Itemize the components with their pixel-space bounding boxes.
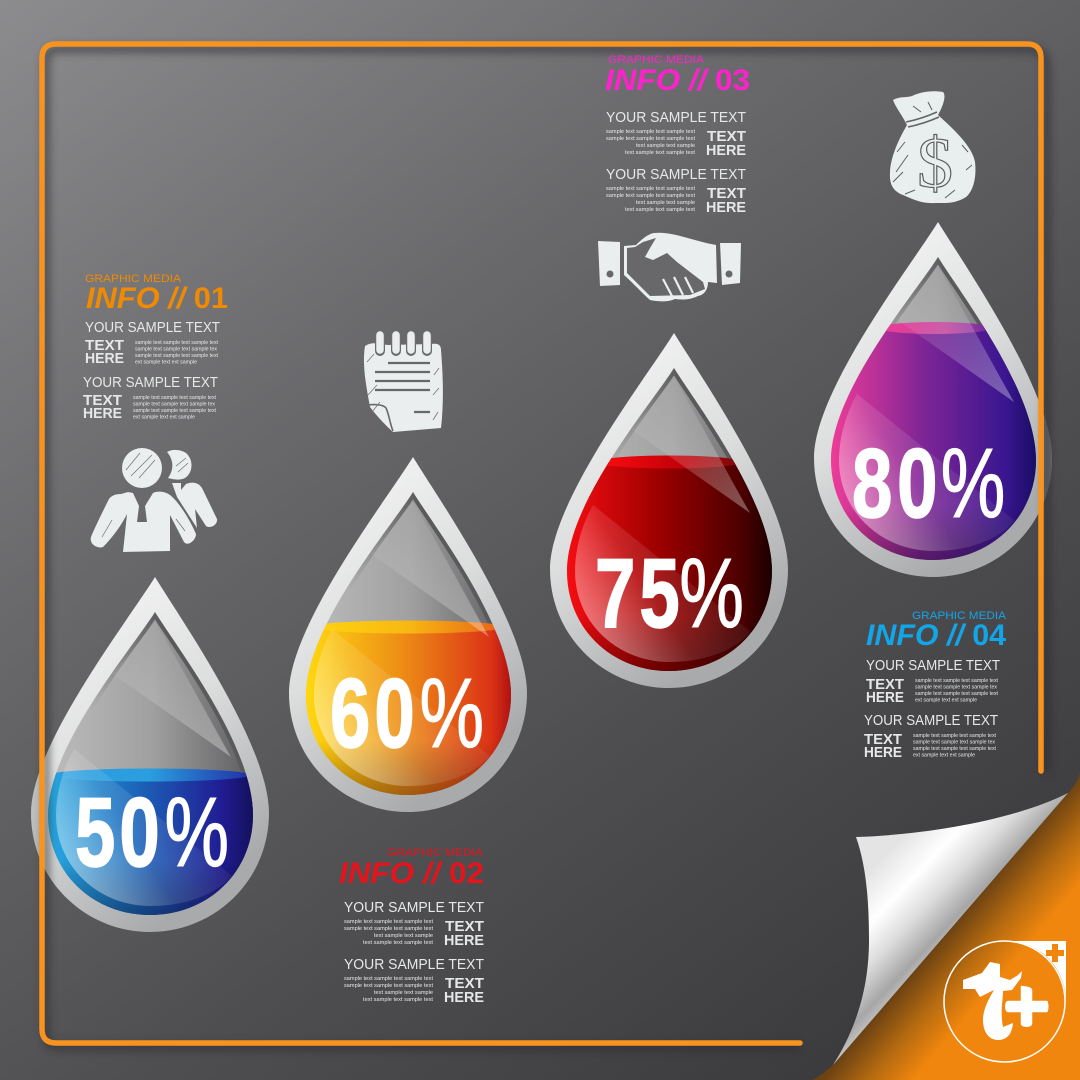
info block 04: sample text sample text sample text	[913, 733, 996, 739]
info block 03: GRAPHIC MEDIA	[608, 54, 705, 66]
drop 80% purple	[814, 222, 1052, 577]
info block 01: HERE	[83, 405, 122, 422]
page curl: orange corner	[813, 773, 1080, 1080]
info block 02: text sample text sample	[374, 933, 433, 939]
label: 60%: %	[420, 659, 484, 769]
info block 04: sample text sample text sample tex	[913, 740, 995, 746]
info block 03: text sample text sample	[636, 143, 695, 149]
label: 75%: 75	[595, 539, 680, 649]
logo	[944, 941, 1066, 1062]
label: 80%: 80	[852, 429, 937, 539]
info block 01: sample text sample text sample text	[133, 395, 216, 401]
info block 03: TEXT	[707, 185, 746, 202]
drop 60% orange	[289, 457, 527, 812]
info block 02: YOUR SAMPLE TEXT	[344, 956, 484, 973]
info block 04	[864, 610, 1007, 761]
info block 03: sample text sample text sample text	[606, 193, 696, 199]
info block 03: text sample text sample text	[625, 207, 696, 213]
info block 01: sample text sample text sample text	[133, 408, 216, 414]
info block 04: YOUR SAMPLE TEXT	[864, 712, 998, 729]
label: 60%: 60	[330, 659, 415, 769]
info block 04: HERE	[866, 689, 904, 706]
info block 01	[83, 273, 228, 422]
info block 03: INFO // 03	[605, 64, 750, 97]
info block 03	[605, 54, 750, 216]
info block 02: TEXT	[445, 918, 484, 935]
info block 03: YOUR SAMPLE TEXT	[606, 109, 746, 126]
info block 02	[339, 847, 484, 1006]
icon: money bag	[890, 91, 975, 203]
label: dollar sign: $	[917, 123, 953, 203]
veil outside frame left	[31, 773, 40, 856]
info block 02: GRAPHIC MEDIA	[387, 847, 484, 859]
info block 04: sample text sample text sample text	[913, 746, 996, 752]
info block 02: sample text sample text sample text	[344, 926, 434, 932]
info block 04: ext sample text ext sample	[913, 752, 975, 758]
info block 04: TEXT	[866, 676, 904, 693]
info block 02: sample text sample text sample text	[344, 976, 434, 982]
info block 03: TEXT	[707, 128, 746, 145]
info block 03: sample text sample text sample text	[606, 186, 696, 192]
info block 04: sample text sample text sample text	[915, 678, 998, 684]
info block 02: HERE	[444, 989, 484, 1006]
info block 01: TEXT	[85, 337, 124, 354]
info block 03: YOUR SAMPLE TEXT	[606, 166, 746, 183]
label: 80%: %	[941, 429, 1005, 539]
info block 03: HERE	[706, 142, 746, 159]
info block 02: HERE	[444, 932, 484, 949]
info block 04: sample text sample text sample tex	[915, 684, 997, 690]
icon: handshake	[598, 233, 741, 301]
info block 04: sample text sample text sample text	[915, 691, 998, 697]
info block 01: ext sample text ext sample	[133, 414, 195, 420]
info block 02: text sample text sample text	[363, 997, 434, 1003]
info block 01: HERE	[85, 350, 124, 367]
veil outside frame right	[1044, 416, 1052, 500]
info block 01: TEXT	[83, 392, 122, 409]
info block 01: INFO // 01	[86, 282, 228, 315]
info block 02: text sample text sample	[374, 990, 433, 996]
info block 04: YOUR SAMPLE TEXT	[866, 657, 1000, 674]
info block 02: text sample text sample text	[363, 940, 434, 946]
info block 03: text sample text sample text	[625, 150, 696, 156]
info block 04: INFO // 04	[866, 619, 1006, 652]
info block 02: INFO // 02	[339, 857, 484, 890]
info block 01: ext sample text ext sample	[135, 360, 197, 366]
info block 03: text sample text sample	[636, 200, 695, 206]
info block 04: GRAPHIC MEDIA	[912, 610, 1007, 622]
page curl: white flap	[833, 793, 1068, 1065]
label: 75%: %	[679, 539, 744, 649]
info block 02: TEXT	[445, 975, 484, 992]
info block 01: YOUR SAMPLE TEXT	[83, 374, 218, 391]
info block 04: HERE	[864, 744, 902, 761]
info block 03: sample text sample text sample text	[606, 129, 696, 135]
info block 01: YOUR SAMPLE TEXT	[85, 319, 220, 336]
info block 01: GRAPHIC MEDIA	[85, 273, 182, 285]
icon: people	[91, 448, 217, 552]
drop 50% blue	[31, 577, 269, 932]
info block 01: sample text sample text sample tex	[135, 346, 217, 352]
info block 04: ext sample text ext sample	[915, 698, 977, 704]
info block 02: sample text sample text sample text	[344, 983, 434, 989]
label: 50%: %	[165, 778, 229, 888]
drop 75% red	[550, 333, 788, 688]
info block 01: sample text sample text sample text	[135, 353, 218, 359]
info block 02: sample text sample text sample text	[344, 919, 434, 925]
info block 01: sample text sample text sample text	[135, 340, 218, 346]
info block 01: sample text sample text sample tex	[133, 402, 215, 408]
info block 03: sample text sample text sample text	[606, 136, 696, 142]
icon: notepad	[364, 335, 443, 432]
info block 02: YOUR SAMPLE TEXT	[344, 899, 484, 916]
label: 50%: 50	[75, 778, 160, 888]
info block 04: TEXT	[864, 731, 902, 748]
info block 03: HERE	[706, 199, 746, 216]
